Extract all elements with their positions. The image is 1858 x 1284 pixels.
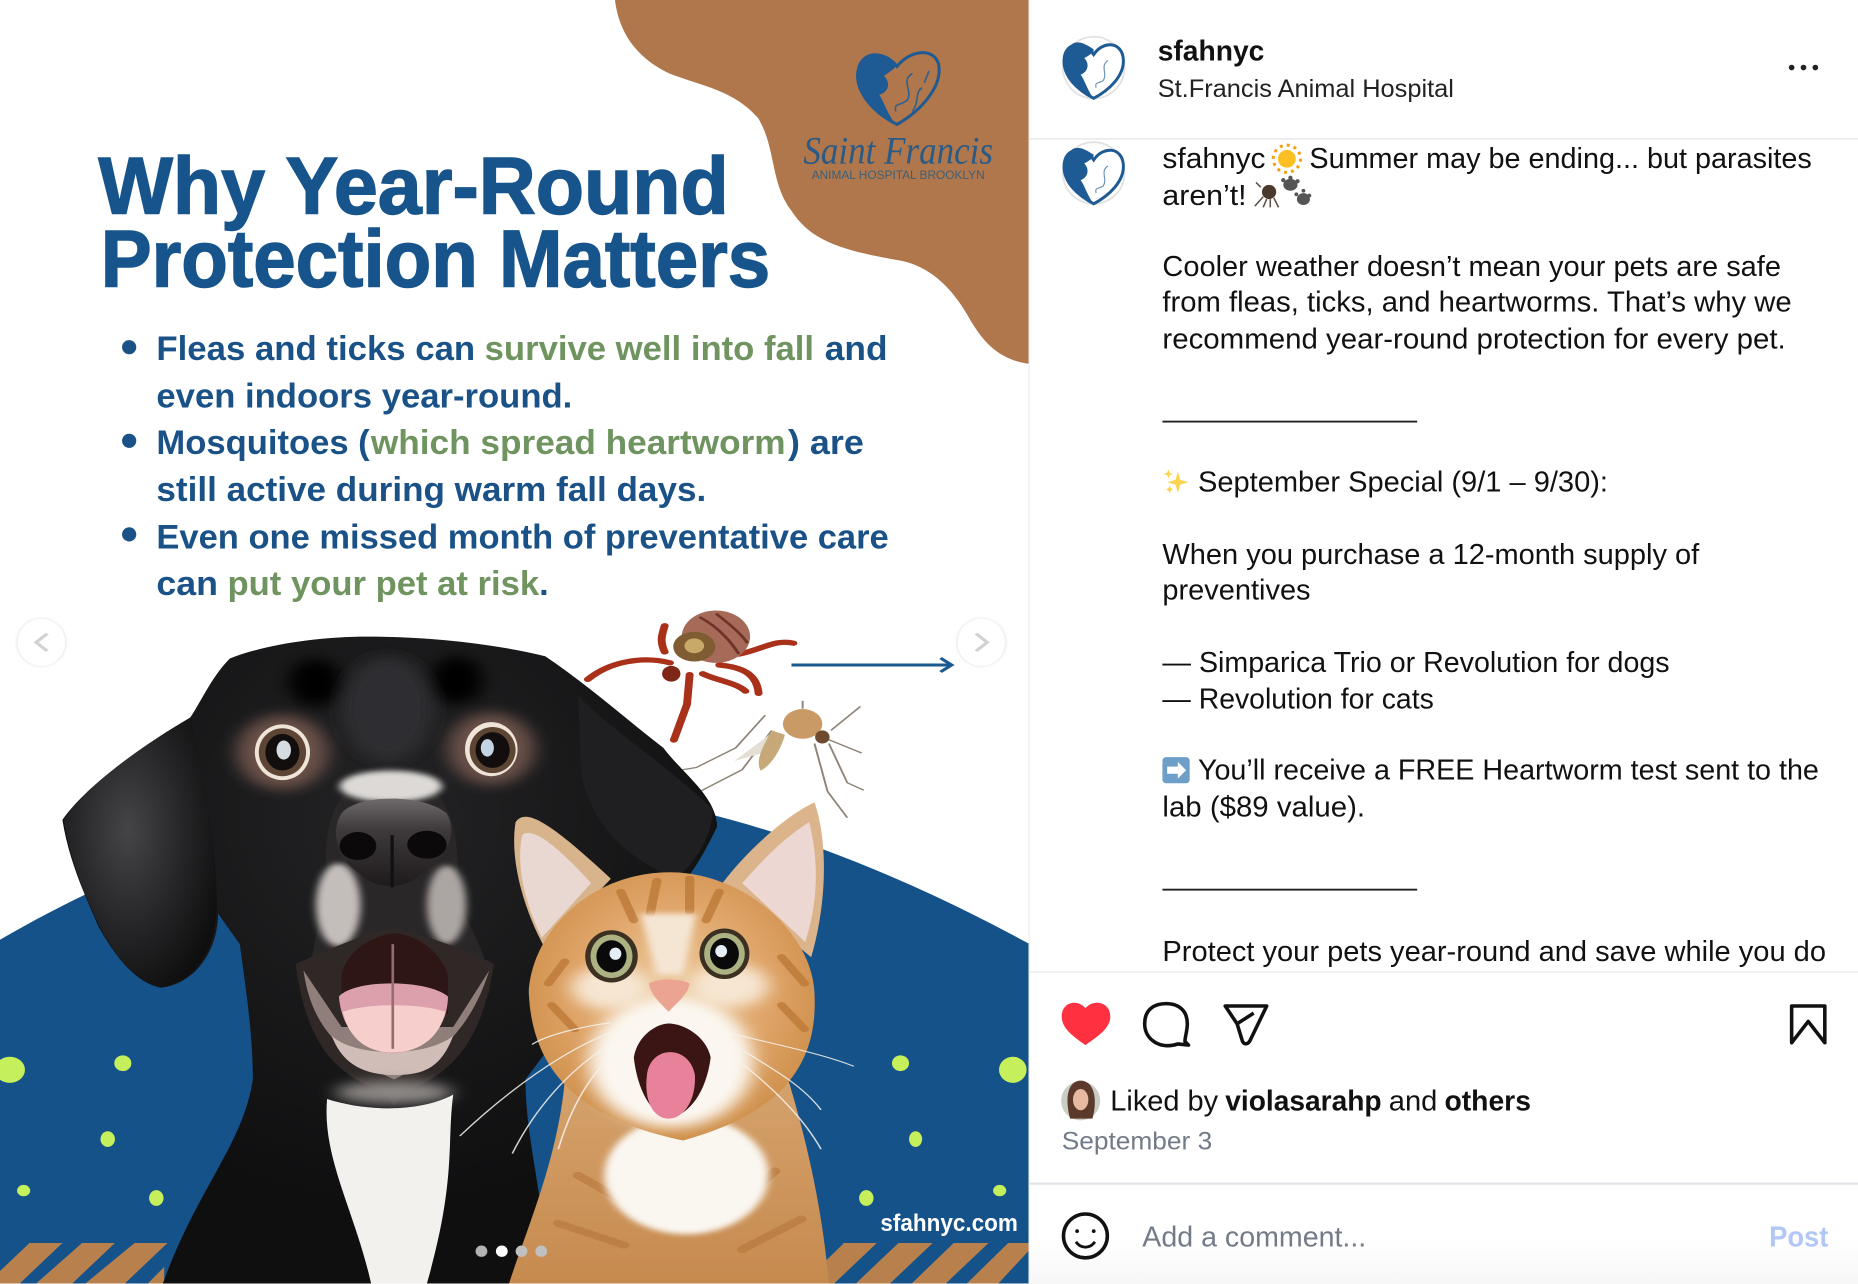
special offer: — Simparica Trio or Revolution for dogs bbox=[1162, 647, 1670, 679]
cat right ear bbox=[722, 802, 824, 957]
dog bbox=[62, 637, 717, 1284]
brown stripes bbox=[0, 1243, 1030, 1284]
likes line: others bbox=[1444, 1085, 1531, 1117]
paragraph: from fleas, ticks, and heartworms. That’s why we bbox=[1162, 287, 1792, 319]
icon: smiley bbox=[1063, 1214, 1107, 1258]
special offer: — Revolution for cats bbox=[1162, 684, 1434, 716]
icon: paw emoji bbox=[1281, 176, 1311, 205]
intro line bbox=[1162, 143, 1812, 212]
arrow bbox=[791, 658, 952, 672]
bullet 3: put your pet at risk bbox=[228, 565, 540, 603]
special offer: September Special (9/1 – 9/30): bbox=[1198, 467, 1608, 499]
cat bbox=[460, 802, 854, 1284]
cat muzzle bbox=[589, 996, 753, 1127]
dog silhouette bbox=[62, 637, 717, 1284]
icon: heart bbox=[1062, 1003, 1110, 1045]
carousel dots bbox=[476, 1246, 547, 1257]
cat white brow blaze bbox=[640, 914, 696, 975]
icon: send bbox=[1225, 1006, 1267, 1044]
icon: bookmark bbox=[1792, 1006, 1825, 1043]
title: Why Year-Round bbox=[98, 141, 729, 231]
bullet 1: Fleas and ticks can bbox=[156, 330, 475, 368]
paragraph: recommend year-round protection for every pet. bbox=[1162, 323, 1786, 355]
cat left ear bbox=[514, 817, 611, 949]
title: Protection Matters bbox=[101, 215, 770, 305]
panel: header bbox=[1030, 0, 1858, 140]
bullet 2: ) are bbox=[788, 424, 864, 462]
cat right eye bbox=[700, 928, 749, 979]
icon: mosquito emoji bbox=[1255, 182, 1279, 207]
title bbox=[98, 141, 770, 305]
cat left eye bbox=[585, 930, 638, 983]
more menu bbox=[1789, 65, 1818, 70]
cat cheek light bbox=[571, 966, 650, 1010]
bullet 1: and bbox=[825, 330, 888, 368]
cat mouth bbox=[634, 1024, 711, 1119]
account subtitle: St.Francis Animal Hospital bbox=[1158, 75, 1454, 103]
bullet 2 bbox=[122, 424, 864, 509]
free test bbox=[1162, 755, 1819, 823]
dog left ear bbox=[64, 717, 217, 987]
header avatar bbox=[1063, 37, 1125, 98]
dog nose bbox=[336, 799, 451, 886]
date: September 3 bbox=[1062, 1127, 1212, 1155]
blue arch background bbox=[0, 787, 1030, 1284]
bullet 1 bbox=[122, 330, 888, 416]
intro line: aren’t! bbox=[1162, 180, 1247, 212]
dog brow highlights bbox=[289, 658, 342, 706]
panel: post image bbox=[0, 0, 1030, 1284]
dog chin bbox=[335, 1081, 453, 1104]
caption: Protect your pets year-round and save while you do bbox=[1162, 936, 1826, 968]
cat chest bbox=[604, 1116, 768, 1234]
paragraph bbox=[1162, 251, 1792, 355]
bullet 3: can bbox=[156, 565, 218, 603]
free test: lab ($89 value). bbox=[1162, 791, 1365, 823]
account name: sfahnyc bbox=[1158, 35, 1264, 67]
special offer bbox=[1162, 467, 1699, 716]
cat body bbox=[509, 1079, 829, 1284]
logo wordmark: Saint Francis bbox=[803, 130, 993, 173]
bullet 2: Mosquitoes ( bbox=[156, 424, 370, 462]
icon: sparkles emoji bbox=[1164, 469, 1189, 493]
bullet 2: which spread heartworm bbox=[370, 424, 786, 462]
icon: tick bbox=[588, 610, 793, 740]
likes line: Liked by bbox=[1110, 1085, 1219, 1117]
logo tagline: ANIMAL HOSPITAL BROOKLYN bbox=[812, 168, 985, 182]
cat tongue bbox=[646, 1052, 695, 1119]
brown corner blob bbox=[615, 0, 1029, 364]
bullet 3: . bbox=[539, 565, 549, 603]
icon: comment bbox=[1145, 1004, 1189, 1046]
panel: post sidebar bbox=[1029, 0, 1858, 1284]
icon: arrow emoji bbox=[1162, 757, 1190, 783]
logo: Saint Francis bbox=[803, 53, 993, 182]
post button: Post bbox=[1769, 1222, 1829, 1254]
bullet 3 bbox=[122, 519, 889, 603]
cat head bbox=[529, 872, 815, 1140]
dog muzzle bbox=[309, 776, 490, 1106]
intro line: Summer may be ending... but parasites bbox=[1309, 143, 1812, 175]
likes line bbox=[1110, 1085, 1531, 1117]
nav button left bbox=[18, 619, 65, 666]
nav button right bbox=[958, 619, 1005, 666]
icon: mosquito bbox=[624, 701, 864, 818]
icon: logo heart bbox=[858, 53, 939, 124]
liker avatar bbox=[1061, 1081, 1100, 1120]
dog mouth bbox=[296, 929, 494, 1095]
illustration: scene in zoom space bbox=[0, 610, 1030, 1284]
bullet 2: still active during warm fall days. bbox=[156, 471, 706, 509]
cat body stripes bbox=[558, 1171, 801, 1249]
dog left eye bbox=[236, 715, 328, 789]
special offer: preventives bbox=[1162, 575, 1311, 607]
paragraph: Cooler weather doesn’t mean your pets are safe bbox=[1162, 251, 1781, 283]
dog chest bbox=[327, 1095, 453, 1284]
intro line: sfahnyc bbox=[1162, 143, 1266, 175]
website label: sfahnyc.com bbox=[880, 1211, 1018, 1237]
whiskers bbox=[460, 1023, 854, 1154]
icon: sun emoji bbox=[1273, 145, 1300, 172]
cat forehead stripes bbox=[548, 879, 805, 1029]
free test: You’ll receive a FREE Heartworm test sent to the bbox=[1198, 755, 1819, 787]
dog right eye bbox=[448, 713, 535, 785]
bullet 3: Even one missed month of preventative care bbox=[156, 519, 889, 557]
cat nose bbox=[649, 979, 690, 1012]
special offer: When you purchase a 12-month supply of bbox=[1162, 539, 1699, 571]
green dots bbox=[0, 1055, 1027, 1206]
panel: actions footer bbox=[1030, 971, 1858, 1284]
caption bbox=[1063, 142, 1826, 968]
likes line: and bbox=[1389, 1085, 1437, 1117]
bullet 1: even indoors year-round. bbox=[156, 378, 572, 416]
bullet list bbox=[122, 330, 889, 603]
bullet 1: survive well into fall bbox=[485, 330, 814, 368]
comment input placeholder: Add a comment... bbox=[1142, 1222, 1366, 1254]
dog right ear sheen bbox=[578, 696, 713, 879]
caption avatar bbox=[1063, 142, 1125, 204]
likes line: violasarahp bbox=[1225, 1085, 1382, 1117]
